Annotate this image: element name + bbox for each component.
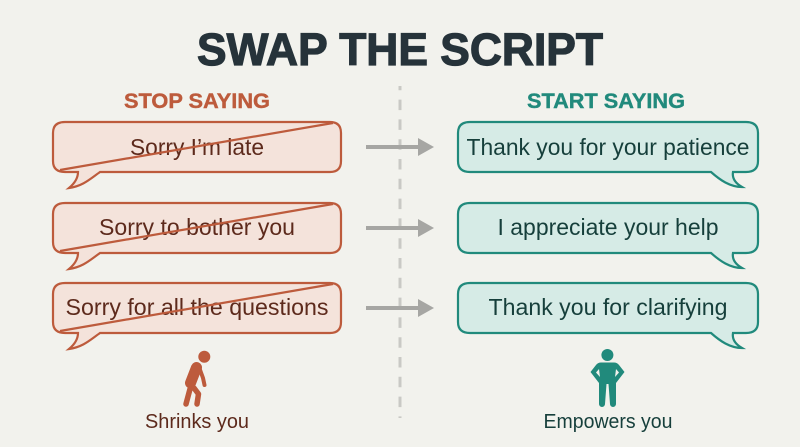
arrow 2 xyxy=(366,219,434,237)
arrow 1 xyxy=(366,138,434,156)
panel: stop bubble 1: Sorry I’m late xyxy=(130,134,264,160)
title: SWAP THE SCRIPT xyxy=(197,24,603,75)
panel: start bubble 2: I appreciate your help xyxy=(498,214,718,240)
panel: start bubble 1 xyxy=(458,122,758,187)
panel: stop bubble 2: Sorry to bother you xyxy=(99,214,295,240)
panel: start bubble 2 xyxy=(458,203,758,268)
heading: stop saying: STOP SAYING xyxy=(124,89,270,113)
label: shrinks you: Shrinks you xyxy=(145,411,249,433)
panel: start bubble 3 xyxy=(458,283,758,348)
icon: slumped person xyxy=(186,351,210,404)
heading: start saying: START SAYING xyxy=(527,89,685,113)
icon: confident person xyxy=(590,349,624,407)
panel: stop bubble 2 xyxy=(53,203,341,269)
panel: start bubble 3: Thank you for clarifying xyxy=(488,294,728,320)
panel: stop bubble 1 xyxy=(53,122,341,188)
arrow 3 xyxy=(366,299,434,317)
label: empowers you: Empowers you xyxy=(544,411,672,433)
panel: start bubble 1: Thank you for your patience xyxy=(466,134,750,160)
panel: stop bubble 3 xyxy=(53,283,341,349)
panel: stop bubble 3: Sorry for all the questions xyxy=(66,294,328,320)
